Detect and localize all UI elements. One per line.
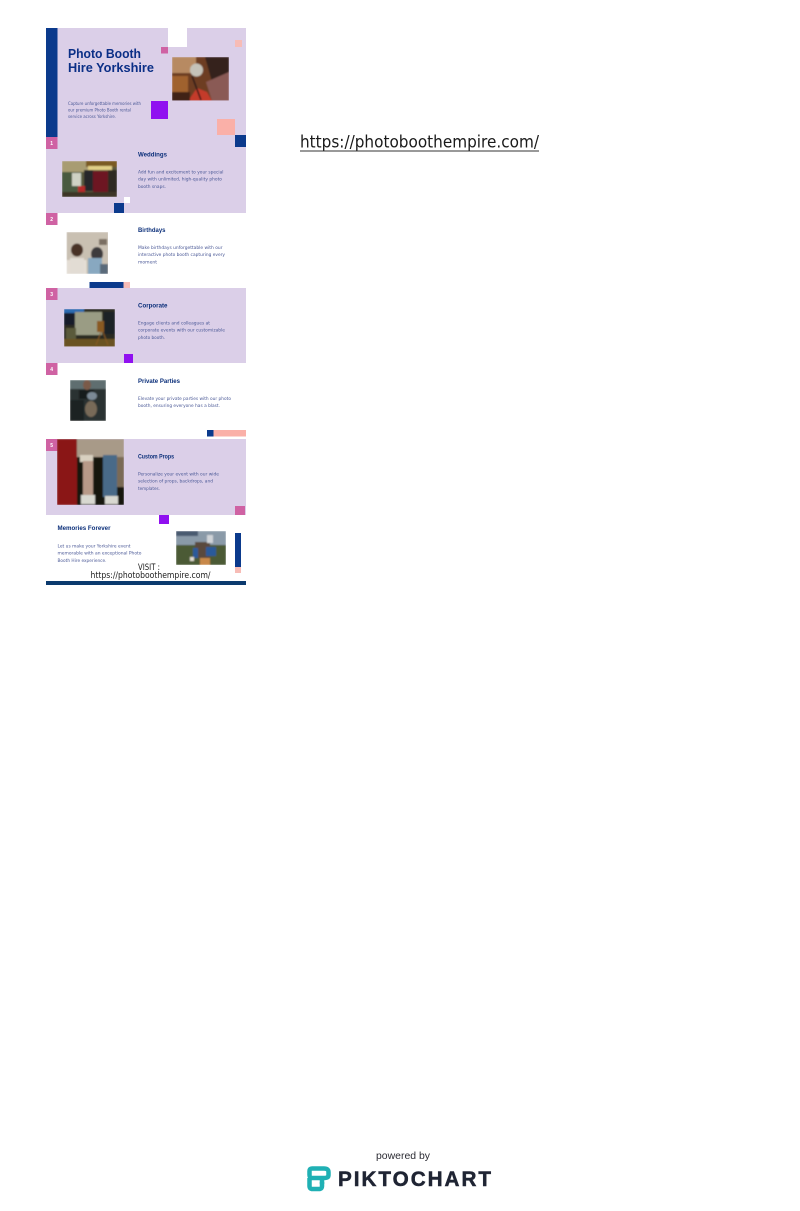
notch: white square <box>168 28 187 47</box>
panel: custom props <box>46 439 246 515</box>
accent: navy vertical bar <box>235 533 241 567</box>
text: custom props <box>138 472 219 492</box>
photo: memories forever <box>176 531 226 565</box>
accent: light salmon tiny square <box>235 40 242 47</box>
badge 2: 2 <box>50 217 53 223</box>
badge 3: 3 <box>50 292 53 298</box>
accent: salmon bar <box>214 430 246 436</box>
visit url: https://photoboothempire.com/ <box>90 571 211 581</box>
accent: pink small square <box>161 47 168 54</box>
photo: private parties <box>70 380 106 421</box>
text: birthdays <box>138 245 225 266</box>
text: corporate: photo booth. <box>138 335 165 341</box>
photo: vintage booth interior <box>172 57 229 101</box>
text: corporate <box>138 320 225 341</box>
accent: navy bar <box>90 282 124 288</box>
badge 5 <box>46 439 58 451</box>
badge 4 <box>46 363 58 375</box>
accent: salmon small bar <box>124 282 130 288</box>
photo: custom props <box>57 439 124 505</box>
text: memories forever <box>58 544 142 564</box>
text: custom props: Personalize your event with our wide <box>138 472 219 478</box>
text: birthdays: Make birthdays unforgettable with our <box>138 245 223 251</box>
badge 3 <box>46 288 58 300</box>
photo: wedding booth <box>62 161 117 197</box>
heading: private parties: Private Parties <box>138 378 180 385</box>
panel: corporate <box>46 288 246 363</box>
accent: purple square <box>159 515 169 524</box>
badge 1 <box>46 137 58 149</box>
text: weddings: day with unlimited, high-quality photo <box>138 176 222 182</box>
heading: weddings: Weddings <box>138 152 167 158</box>
accent: navy small square <box>207 430 214 436</box>
footer bar <box>46 581 246 585</box>
badge 1: 1 <box>50 141 53 147</box>
accent: purple square <box>124 354 133 363</box>
visit label: VISIT : <box>138 563 160 573</box>
title: Photo Booth <box>68 46 141 61</box>
accent: navy square <box>235 135 246 147</box>
text: memories forever: Let us make your Yorkshire event <box>58 544 131 550</box>
text: weddings: booth snaps. <box>138 184 166 190</box>
intro text <box>68 101 141 120</box>
text: weddings: Add fun and excitement to your special <box>138 170 224 176</box>
badge 5: 5 <box>50 443 53 449</box>
text: birthdays: moment <box>138 260 157 266</box>
heading: corporate: Corporate <box>138 302 168 310</box>
intro text: Capture unforgettable memories with <box>68 101 141 107</box>
heading: custom props: Custom Props <box>138 454 174 460</box>
intro text: our premium Photo Booth rental <box>68 108 131 114</box>
title line 2: Hire Yorkshire <box>68 60 154 75</box>
accent bar: navy left <box>46 28 58 137</box>
text: corporate: Engage clients and colleagues at <box>138 320 210 326</box>
icon: piktochart logo <box>310 1168 328 1189</box>
heading: birthdays: Birthdays <box>138 227 166 234</box>
badge 4: 4 <box>50 367 53 373</box>
accent: salmon square <box>217 119 235 135</box>
powered by: powered by <box>376 1151 430 1162</box>
text: private parties: Elevate your private parties with our photo <box>138 396 231 402</box>
badge 2 <box>46 213 58 225</box>
text: corporate: corporate events with our customizable <box>138 328 225 334</box>
text: custom props: selection of props, backdrops, and <box>138 478 213 484</box>
accent: navy small square <box>114 203 124 213</box>
panel: hero and weddings <box>46 28 246 213</box>
heading: memories forever: Memories Forever <box>58 525 111 532</box>
accent: salmon small square <box>235 567 241 573</box>
photo: birthdays <box>66 232 108 274</box>
text: weddings <box>138 170 224 190</box>
text: private parties: booth, ensuring everyone has a blast. <box>138 403 220 409</box>
text: birthdays: interactive photo booth capturing every <box>138 252 225 258</box>
photo: corporate <box>64 309 115 347</box>
text: custom props: templates. <box>138 486 160 492</box>
accent: white small square <box>124 197 130 203</box>
intro text: service across Yorkshire. <box>68 114 116 120</box>
link: website url: https://photoboothempire.com/ <box>300 132 539 152</box>
accent: pink square <box>235 506 245 515</box>
text: memories forever: memorable with an exceptional Photo <box>58 550 142 556</box>
text: private parties <box>138 396 231 409</box>
wordmark: piktochart: PIKTOCHART <box>338 1168 493 1191</box>
text: memories forever: Booth Hire experience. <box>58 558 106 564</box>
accent: purple square <box>151 101 168 119</box>
